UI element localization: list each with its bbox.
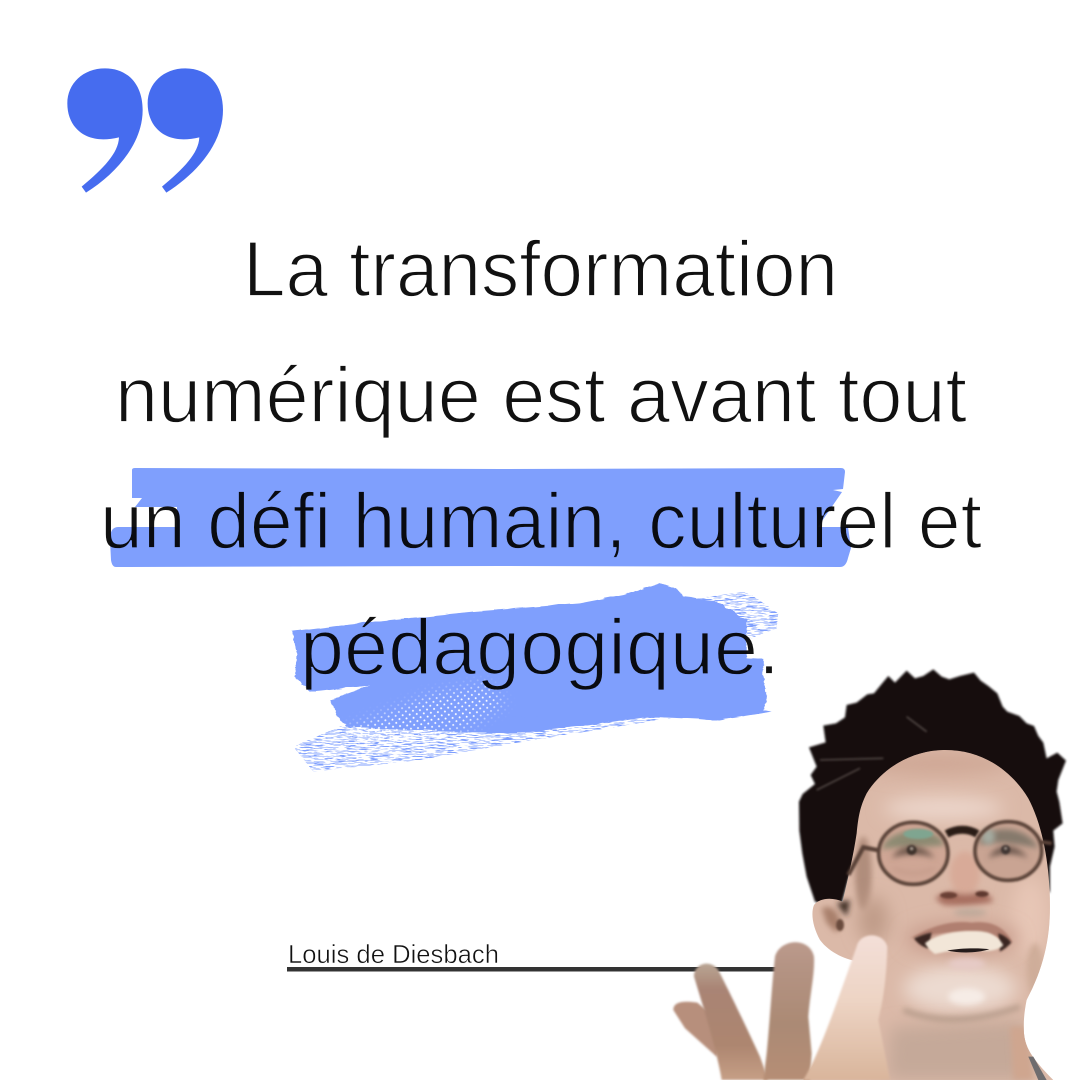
- nose: [935, 852, 993, 917]
- eyes: [892, 847, 935, 858]
- quote text: pédagogique.: [300, 602, 780, 691]
- left lens: [880, 823, 947, 883]
- mouth: [905, 922, 1018, 970]
- hair: [799, 669, 1066, 910]
- brush dry upper right edge: [683, 592, 778, 642]
- index finger: [694, 964, 768, 1080]
- quote text: numérique est avant tout: [115, 350, 967, 439]
- quote text: un défi humain, culturel et: [100, 476, 982, 565]
- brush dry lower edge: [293, 713, 680, 772]
- right lens: [977, 823, 1040, 879]
- illustration: smiling man with raised hand: [673, 669, 1067, 1080]
- brush halftone texture: [336, 676, 512, 749]
- ear inner: [822, 907, 840, 932]
- middle finger: [763, 942, 814, 1080]
- quote text: [90, 220, 990, 700]
- shirt collar: [1028, 1057, 1047, 1080]
- face and neck: [800, 740, 1067, 1080]
- pinky finger: [673, 1002, 727, 1057]
- brush body: [293, 583, 772, 733]
- highlight: brush stroke behind pédagogique: [293, 583, 778, 772]
- author underline: [287, 967, 777, 972]
- frames: [848, 822, 1052, 884]
- highlight: line three marker stroke: [110, 468, 851, 567]
- quote text: La transformation: [243, 224, 838, 313]
- icon: quotation marks: [67, 68, 223, 193]
- author name: Louis de Diesbach: [288, 939, 499, 969]
- glasses: [848, 822, 1052, 884]
- thumb: [803, 935, 890, 1080]
